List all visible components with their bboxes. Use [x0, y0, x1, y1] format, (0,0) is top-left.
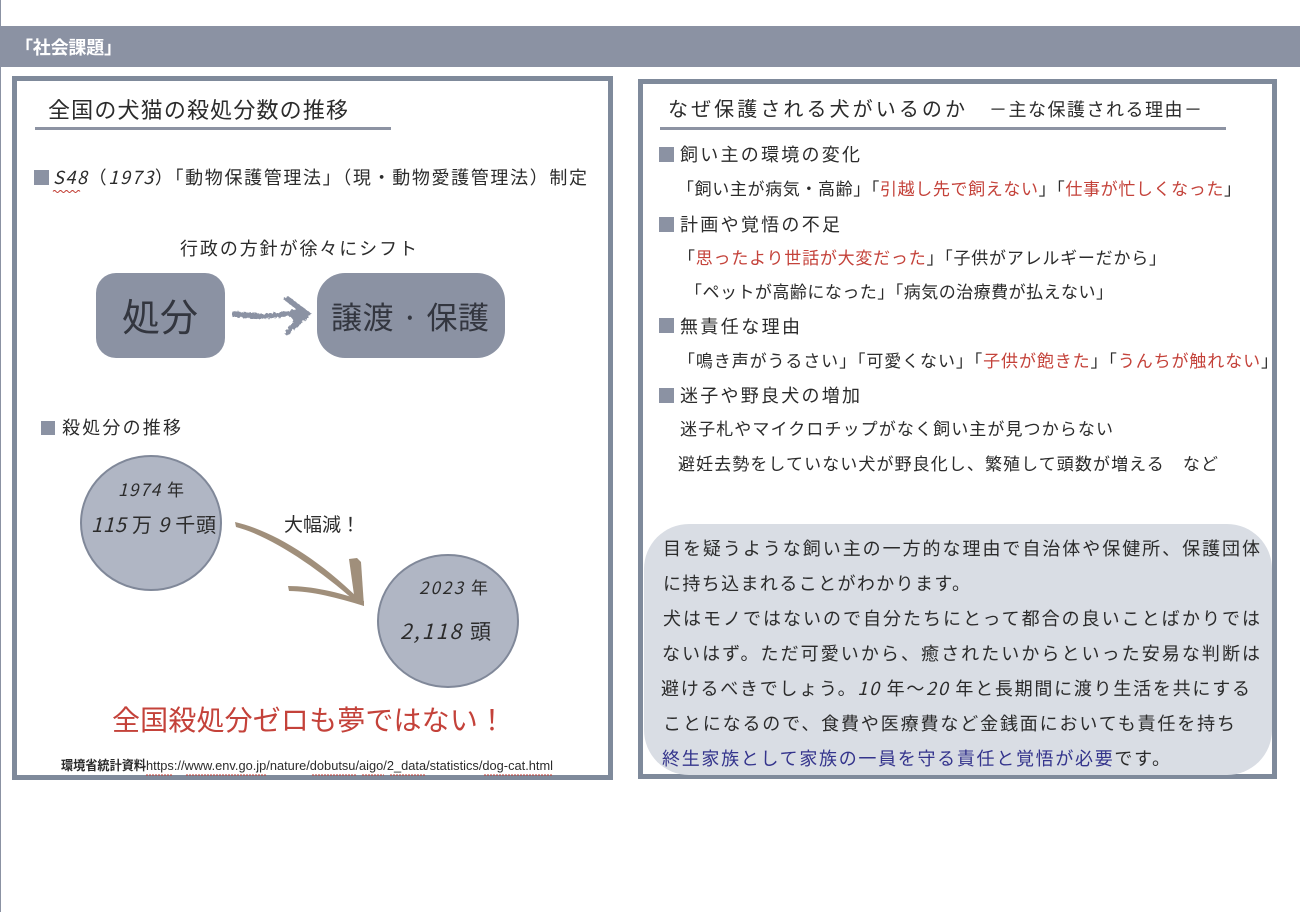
reason group: strays: 迷子札やマイクロチップがなく飼い主が見つからない [680, 415, 1113, 440]
panel heading: 全国の犬猫の殺処分数の推移 [48, 93, 348, 125]
box: transfer and protection: 譲渡 · 保護 [331, 293, 489, 338]
law enactment note: S48（1973）「動物保護管理法」（現・動物愛護管理法）制定 [53, 164, 587, 190]
reason group: lack of planning [659, 211, 1166, 303]
red conclusion: 全国殺処分ゼロも夢ではない！ [112, 699, 506, 739]
policy shift caption: 行政の方針が徐々にシフト [180, 235, 417, 261]
reason group: strays: 迷子や野良犬の増加 [680, 382, 860, 408]
reason group: owner circumstances: 「飼い主が病気・高齢」「引越し先で飼えない」「仕事が忙しくなった」 [677, 175, 1241, 200]
box: disposal [96, 273, 225, 358]
panel: nationwide dog and cat euthanasia trend [14, 78, 610, 778]
box: disposal: 処分 [122, 287, 198, 342]
panel: why dogs need protection [640, 82, 1278, 776]
panel heading: －主な保護される理由－ [989, 96, 1202, 122]
circle: 2023 figure: 2023 年 [419, 574, 488, 599]
reason group: strays [659, 382, 1218, 475]
reason group: lack of planning: 計画や覚悟の不足 [680, 211, 840, 237]
label: sharp decrease: 大幅減！ [284, 510, 360, 537]
source note: 環境省統計資料 [61, 758, 146, 773]
subheading: euthanasia trend: 殺処分の推移 [62, 414, 181, 440]
callout: owner responsibility: ことになるので、食費や医療費など金銭面においても責任を持ち [663, 710, 1235, 736]
panel heading: なぜ保護される犬がいるのか [668, 93, 965, 122]
box: transfer and protection [317, 273, 505, 358]
callout: owner responsibility: 避けるべきでしょう。10 年～20 年と長期間に渡り生活を共にする [661, 675, 1250, 701]
callout: owner responsibility: ないはず。ただ可愛いから、癒されたいからといった安易な判断は [662, 640, 1260, 666]
source note: https://www.env.go.jp/nature/dobutsu/aigo/2_data/statistics/dog-cat.html [146, 758, 553, 773]
reason group: irresponsible reasons [659, 313, 1278, 372]
circle: 2023 figure [378, 555, 518, 687]
callout: owner responsibility: に持ち込まれることがわかります。 [663, 570, 970, 596]
arrow: decrease [235, 522, 364, 606]
panel heading [660, 93, 1226, 130]
circle: 2023 figure: 2,118 頭 [400, 616, 491, 646]
reason group: lack of planning: 「ペットが高齢になった」「病気の治療費が払えない」 [685, 278, 1113, 303]
circle: 1974 figure [81, 456, 221, 590]
callout: owner responsibility: 犬はモノではないので自分たちにとって都合の良いことばかりでは [663, 605, 1260, 631]
reason group: irresponsible reasons: 「鳴き声がうるさい」「可愛くない」「子供が飽きた」「うんちが触れない」 [678, 347, 1278, 372]
callout: owner responsibility: 終生家族として家族の一員を守る責任と覚悟が必要です。 [662, 745, 1170, 771]
callout: owner responsibility [644, 524, 1272, 775]
header band [0, 26, 1300, 67]
circle: 1974 figure: 115 万 9 千頭 [91, 509, 216, 538]
reason group: strays: 避妊去勢をしていない犬が野良化し、繁殖して頭数が増える など [678, 450, 1218, 475]
arrow: policy shift [232, 296, 312, 336]
reason group: irresponsible reasons: 無責任な理由 [680, 313, 800, 339]
callout: owner responsibility: 目を疑うような飼い主の一方的な理由で自治体や保健所、保護団体 [663, 535, 1260, 561]
circle: 1974 figure: 1974 年 [118, 476, 184, 501]
header band: 「社会課題」 [15, 38, 122, 58]
reason group: lack of planning: 「思ったより世話が大変だった」「子供がアレルギーだから」 [678, 244, 1166, 269]
reason group: owner circumstances: 飼い主の環境の変化 [680, 141, 860, 167]
reason group: owner circumstances [659, 141, 1241, 200]
